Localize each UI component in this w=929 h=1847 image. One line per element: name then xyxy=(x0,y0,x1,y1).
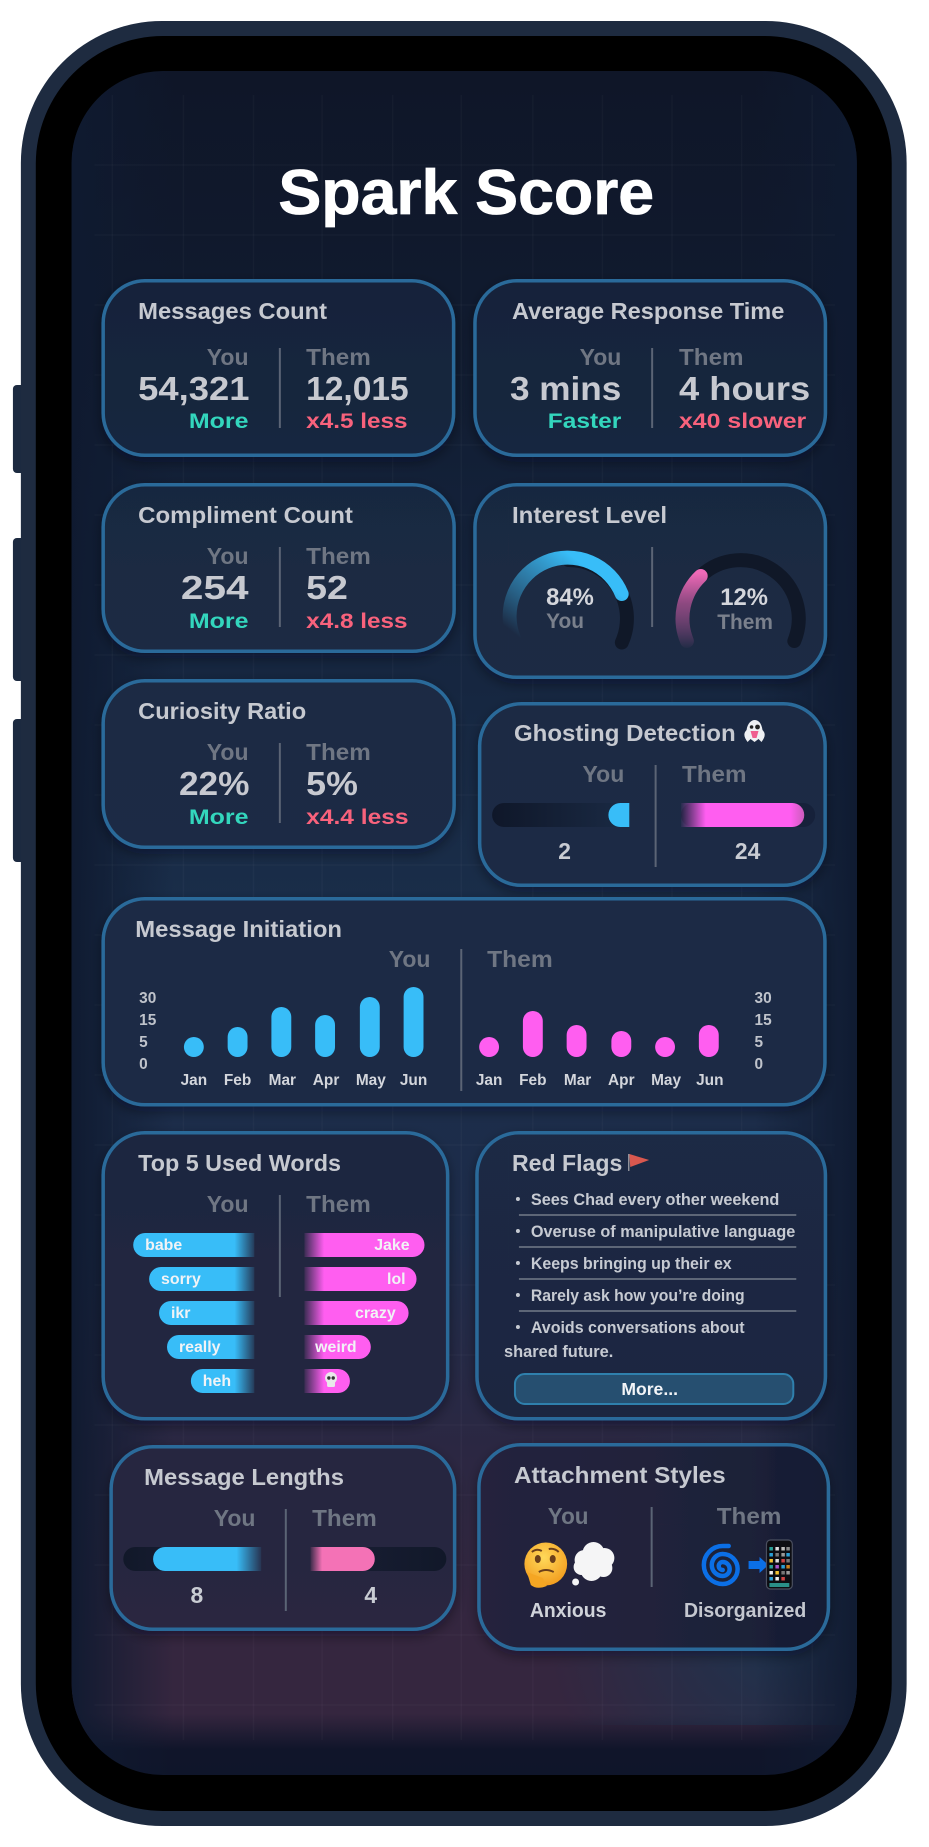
month labels: Jun xyxy=(400,1072,427,1089)
panel: message lengths: Message Lengths xyxy=(144,1464,344,1490)
word pills: you xyxy=(133,1233,266,1393)
panel: compliment count xyxy=(103,485,454,651)
panel: curiosity ratio: More xyxy=(189,806,249,829)
gauge: you 84%: You xyxy=(546,610,584,633)
panel: messages count: You xyxy=(207,344,249,370)
icon: spiral xyxy=(704,1546,738,1584)
word pills: them xyxy=(292,1233,424,1393)
panel: compliment count: More xyxy=(189,610,249,633)
y axis left: 5 xyxy=(139,1034,148,1051)
y axis left: 30 xyxy=(139,990,156,1007)
more button: More... xyxy=(621,1379,678,1399)
panel: attachment styles: Anxious xyxy=(530,1600,606,1622)
gauge: them 12% xyxy=(682,560,799,641)
panel: ghosting detection xyxy=(480,704,825,885)
red flags list: Sees Chad every other weekend xyxy=(531,1191,779,1209)
month labels: May xyxy=(651,1072,681,1089)
panel: compliment count: x4.8 less xyxy=(306,610,408,633)
icon: thinking face xyxy=(524,1542,567,1588)
panel: curiosity ratio: You xyxy=(207,739,249,765)
panel: ghosting detection: Them xyxy=(682,761,747,787)
red flags list xyxy=(504,1191,796,1361)
icon: ghost xyxy=(744,720,765,742)
panel: top 5 used words: Them xyxy=(306,1191,371,1217)
panel: average response time: Faster xyxy=(548,410,621,433)
panel: average response time: You xyxy=(580,344,621,370)
word pills: you: sorry xyxy=(161,1271,201,1288)
month labels: May xyxy=(356,1072,386,1089)
panel: average response time: 4 hours xyxy=(679,370,810,407)
panel: curiosity ratio: 5% xyxy=(306,765,358,802)
month labels: Apr xyxy=(608,1072,635,1089)
panel: message initiation: Them xyxy=(487,946,553,972)
title: Spark Score xyxy=(278,158,654,228)
word pills: you: heh xyxy=(203,1373,231,1390)
panel: message lengths: You xyxy=(214,1505,255,1531)
panel: messages count: More xyxy=(189,410,249,433)
panel: message lengths xyxy=(111,1447,455,1629)
bar: you ghosting xyxy=(492,803,629,827)
icon: arrow xyxy=(749,1557,768,1573)
panel: average response time: Average Response Time xyxy=(512,298,784,324)
icon: thought cloud xyxy=(572,1542,614,1586)
red flags list: Rarely ask how you’re doing xyxy=(531,1287,745,1305)
panel: curiosity ratio xyxy=(103,681,454,847)
y axis left xyxy=(139,990,157,1073)
month labels: Mar xyxy=(269,1072,296,1089)
panel: attachment styles: Attachment Styles xyxy=(514,1462,726,1488)
icon: phone xyxy=(766,1540,792,1589)
red flags list: shared future. xyxy=(504,1343,613,1361)
gauge: them 12%: Them xyxy=(717,611,773,634)
word pills: them: lol xyxy=(387,1271,406,1288)
panel: message initiation xyxy=(103,899,825,1105)
y axis right: 5 xyxy=(755,1034,764,1051)
word pills: them: weird xyxy=(314,1339,357,1356)
bar chart: them xyxy=(479,1011,719,1057)
panel: average response time xyxy=(475,281,825,455)
month labels: Jan xyxy=(476,1072,502,1089)
panel: message lengths: Them xyxy=(312,1505,377,1531)
word pills: them: crazy xyxy=(355,1305,396,1322)
word pills: them: Jake xyxy=(374,1237,410,1254)
panel: curiosity ratio: Curiosity Ratio xyxy=(138,698,306,724)
gauge: them 12%: 12% xyxy=(720,584,768,611)
panel: compliment count: You xyxy=(207,543,249,569)
more button xyxy=(515,1374,793,1404)
panel: message initiation: You xyxy=(389,946,430,972)
panel: ghosting detection: Ghosting Detection xyxy=(514,720,736,746)
month labels: Feb xyxy=(224,1072,251,1089)
month labels: Apr xyxy=(313,1072,339,1089)
panel: message lengths: 8 xyxy=(190,1582,203,1608)
panel: messages count: x4.5 less xyxy=(306,410,408,433)
panel: messages count xyxy=(103,281,454,455)
panel: red flags xyxy=(477,1133,825,1419)
panel: attachment styles: Disorganized xyxy=(684,1600,806,1622)
panel: interest level: Interest Level xyxy=(512,502,667,528)
month labels: Feb xyxy=(519,1072,547,1089)
red flags list: Overuse of manipulative language xyxy=(531,1223,795,1241)
panel: red flags: Red Flags xyxy=(512,1150,622,1176)
y axis right: 30 xyxy=(755,990,772,1007)
bar: you length xyxy=(123,1547,261,1571)
y axis left: 0 xyxy=(139,1056,148,1073)
phone side buttons xyxy=(13,385,27,862)
icon: red flag xyxy=(629,1154,649,1171)
panel: compliment count: 52 xyxy=(306,569,348,606)
panel: attachment styles: Them xyxy=(717,1503,781,1529)
bar: them ghosting xyxy=(681,803,815,827)
y axis left: 15 xyxy=(139,1012,157,1029)
panel: messages count: 54,321 xyxy=(138,370,250,407)
phone screen background xyxy=(72,71,857,1775)
y axis right xyxy=(755,990,772,1073)
icon: skull xyxy=(325,1372,337,1387)
word pills: you: babe xyxy=(145,1237,182,1254)
panel: curiosity ratio: x4.4 less xyxy=(306,806,409,829)
panel: top 5 used words: Top 5 Used Words xyxy=(138,1150,341,1176)
panel: average response time: 3 mins xyxy=(510,370,621,407)
panel: top 5 used words xyxy=(103,1133,448,1419)
panel: message lengths: 4 xyxy=(364,1582,377,1608)
panel: message initiation: Message Initiation xyxy=(135,916,342,942)
panel: messages count: Them xyxy=(306,344,371,370)
panel: attachment styles xyxy=(479,1445,828,1649)
month labels: Mar xyxy=(564,1072,591,1089)
gauge: you 84% xyxy=(510,558,627,642)
red flags list: Keeps bringing up their ex xyxy=(531,1255,732,1273)
panel: interest level xyxy=(475,485,825,677)
panel: ghosting detection: 24 xyxy=(735,838,761,864)
panel: compliment count: Them xyxy=(306,543,371,569)
panel: messages count: Messages Count xyxy=(138,298,327,324)
bar chart: you xyxy=(184,987,423,1057)
month labels: Jun xyxy=(696,1072,723,1089)
gauge: you 84%: 84% xyxy=(546,584,594,611)
y axis right: 0 xyxy=(755,1056,763,1073)
panel: curiosity ratio: 22% xyxy=(179,765,250,802)
panel: messages count: 12,015 xyxy=(306,370,409,407)
month labels: Jan xyxy=(181,1072,207,1089)
panel: ghosting detection: You xyxy=(583,761,624,787)
word pills: you: ikr xyxy=(171,1305,190,1322)
red flags list: Avoids conversations about xyxy=(531,1319,745,1337)
panel: curiosity ratio: Them xyxy=(306,739,371,765)
panel: average response time: Them xyxy=(679,344,744,370)
bar: them length xyxy=(310,1547,446,1571)
y axis right: 15 xyxy=(755,1012,772,1029)
panel: compliment count: 254 xyxy=(181,569,249,606)
panel: compliment count: Compliment Count xyxy=(138,502,353,528)
word pills: you: really xyxy=(179,1339,221,1356)
panel: average response time: x40 slower xyxy=(679,410,806,433)
panel: top 5 used words: You xyxy=(207,1191,249,1217)
panel: ghosting detection: 2 xyxy=(558,838,571,864)
month labels xyxy=(181,1072,723,1089)
panel: attachment styles: You xyxy=(548,1503,589,1529)
